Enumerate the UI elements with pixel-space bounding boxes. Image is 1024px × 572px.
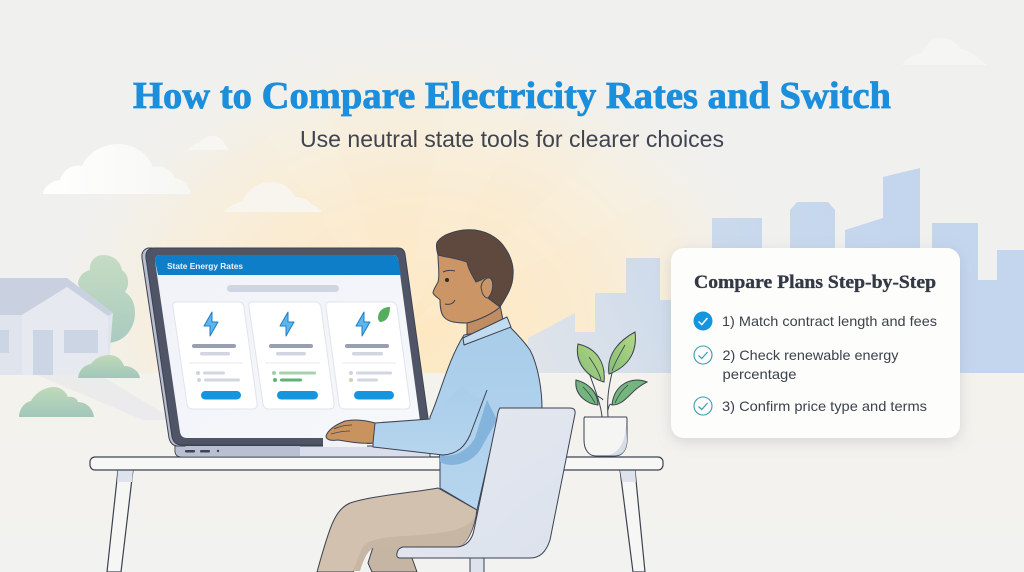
step 2: [694, 346, 898, 382]
panel: compare plans: [671, 248, 960, 438]
face: [433, 255, 500, 323]
step 3: 3) Confirm price type and terms: [722, 398, 927, 414]
hair: [436, 230, 513, 307]
screen header text: State Energy Rates: [167, 262, 244, 271]
desk: [90, 457, 663, 572]
panel heading: Compare Plans Step-by-Step: [694, 272, 936, 293]
city skyline: [528, 168, 1024, 373]
cloud: small left: [188, 136, 229, 150]
cloud: top right: [902, 38, 987, 65]
potted plant: [576, 332, 647, 456]
trousers: [317, 488, 477, 572]
shirt torso: [430, 327, 542, 510]
ear: [481, 278, 493, 298]
house illustration: [0, 278, 175, 420]
cloud: mid left: [224, 182, 322, 212]
title: How to Compare Electricity Rates and Switch: [133, 75, 891, 117]
laptop: [142, 248, 430, 457]
leaf icon: [378, 307, 390, 322]
neck: [467, 305, 503, 338]
far leg: [368, 547, 417, 572]
collar: [463, 317, 511, 345]
laptop screen: [155, 255, 424, 438]
laptop lid side: [142, 248, 185, 446]
bolt icon: [356, 312, 370, 336]
screen header: [155, 255, 401, 275]
step 1: 1) Match contract length and fees: [722, 313, 937, 329]
hand: [326, 420, 375, 443]
cloud: upper left: [43, 144, 191, 194]
subtitle: Use neutral state tools for clearer choices: [300, 126, 724, 152]
laptop ports: [185, 450, 219, 452]
tree behind house: [78, 255, 135, 343]
search bar: [227, 285, 339, 292]
bolt icon: [280, 312, 294, 336]
bolt icon: [204, 312, 218, 336]
plan card 1: [173, 302, 257, 409]
chair: [397, 408, 575, 572]
laptop base left shade: [176, 446, 300, 456]
plan card 3: [326, 302, 410, 409]
step 2: percentage: [722, 366, 797, 382]
ground: [0, 373, 1024, 572]
keyboard highlight under hand: [323, 438, 367, 447]
step 2: 2) Check renewable energy: [722, 347, 898, 363]
person: [317, 230, 542, 572]
laptop base: [175, 446, 430, 457]
eyebrow: [443, 270, 455, 272]
bush near house: [78, 355, 140, 378]
bush foreground: [19, 387, 94, 417]
plan card 2: [249, 302, 334, 409]
shirt sleeve: [373, 385, 487, 455]
arm shadow: [440, 400, 497, 465]
eye: [445, 278, 449, 282]
smile: [445, 300, 455, 304]
sleeve outline: [373, 390, 487, 455]
laptop bezel: [146, 248, 429, 445]
trouser fold shade: [353, 514, 476, 571]
